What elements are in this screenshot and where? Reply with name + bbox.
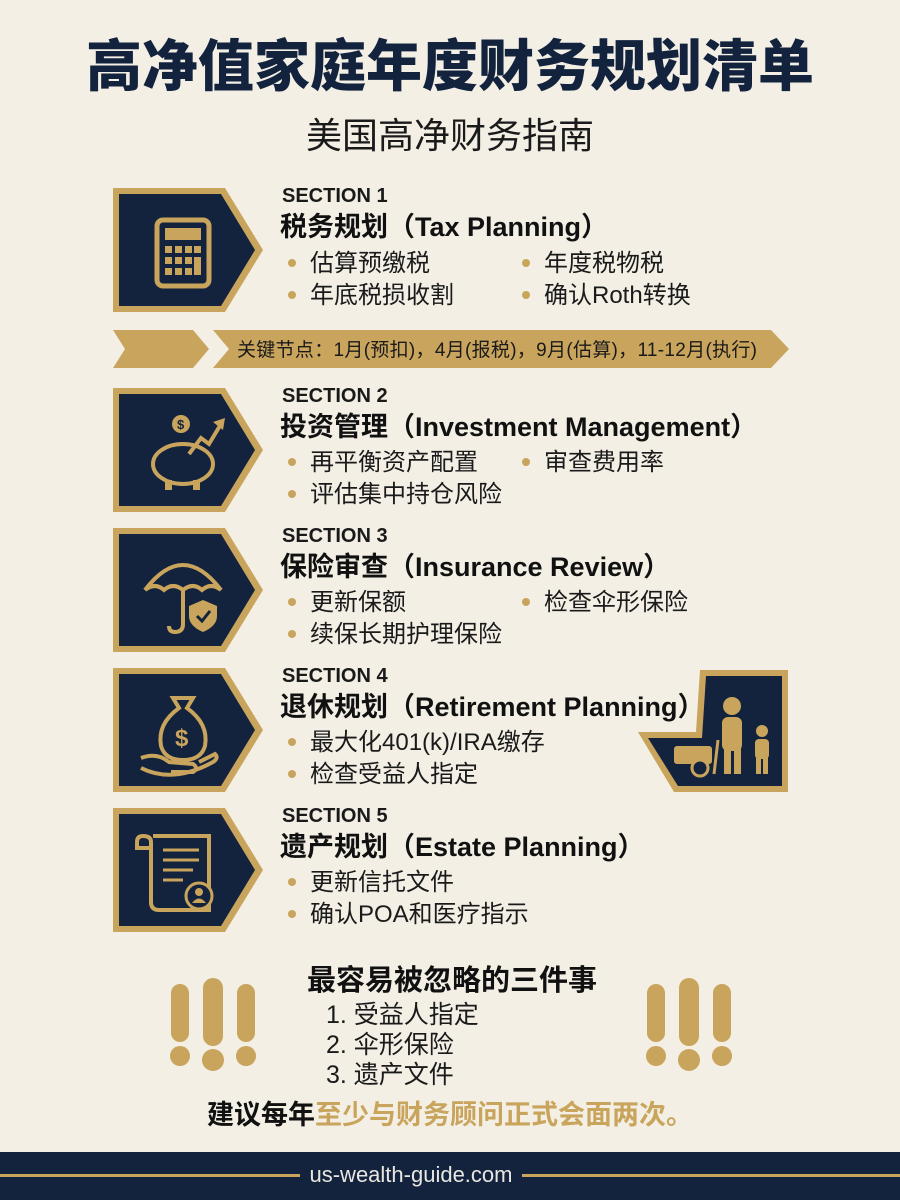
text: SECTION 1: [282, 185, 388, 207]
section 2 text: [280, 385, 757, 508]
icon: left exclamations: [170, 978, 256, 1071]
overlooked items block: 最容易被忽略的三件事: [307, 965, 597, 997]
text: 保险审查（Insurance Review）: [280, 552, 670, 582]
timeline banner: [113, 330, 789, 368]
subtitle: 美国高净财务指南: [306, 115, 594, 156]
timeline banner: 关键节点：1月(预扣)，4月(报税)，9月(估算)，11-12月(执行): [237, 339, 757, 361]
icon: retirement family: [638, 670, 788, 792]
icon panel: section 3 umbrella: [113, 528, 263, 652]
text: 确认POA和医疗指示: [310, 901, 529, 928]
icon panel: section 2 piggy bank: $: [177, 417, 185, 432]
text: 再平衡资产配置: [310, 449, 478, 476]
text: SECTION 5: [282, 805, 388, 827]
text: SECTION 4: [282, 665, 388, 687]
recommendation: 建议每年至少与财务顾问正式会面两次。: [207, 1100, 693, 1130]
text: 检查伞形保险: [544, 589, 688, 616]
icon panel: section 2 piggy bank: [113, 388, 263, 512]
section 5 text: [280, 805, 645, 928]
section 3 text: [280, 525, 688, 648]
text: SECTION 2: [282, 385, 388, 407]
overlooked items block: 3. 遗产文件: [326, 1061, 454, 1089]
footer: [0, 1152, 900, 1200]
text: 年度税物税: [544, 250, 664, 277]
text: 评估集中持仓风险: [310, 481, 502, 508]
section 4 text: [280, 665, 705, 788]
icon panel: section 1 calculator: [113, 188, 263, 312]
text: 年底税损收割: [310, 282, 454, 309]
icon panel: section 5 document: [113, 808, 263, 932]
text: 确认Roth转换: [544, 282, 691, 309]
text: 最大化401(k)/IRA缴存: [310, 729, 545, 756]
icon panel: section 4 money bag: $: [175, 725, 189, 752]
overlooked items block: [307, 964, 597, 1089]
icon panel: section 4 money bag: [113, 668, 263, 792]
text: 估算预缴税: [310, 250, 430, 277]
overlooked items block: 2. 伞形保险: [326, 1031, 454, 1059]
title: 高净值家庭年度财务规划清单: [86, 35, 814, 98]
footer: us-wealth-guide.com: [310, 1162, 512, 1187]
text: 税务规划（Tax Planning）: [280, 212, 608, 242]
icon: right exclamations: [646, 978, 732, 1071]
text: 更新保额: [310, 589, 406, 616]
text: 遗产规划（Estate Planning）: [280, 832, 645, 862]
text: 更新信托文件: [310, 869, 454, 896]
section 1 text: [280, 185, 691, 309]
text: 退休规划（Retirement Planning）: [280, 692, 705, 722]
text: 检查受益人指定: [310, 761, 478, 788]
overlooked items block: 1. 受益人指定: [326, 1001, 479, 1029]
text: 续保长期护理保险: [310, 621, 502, 648]
text: 审查费用率: [544, 449, 664, 476]
text: SECTION 3: [282, 525, 388, 547]
text: 投资管理（Investment Management）: [280, 412, 757, 442]
